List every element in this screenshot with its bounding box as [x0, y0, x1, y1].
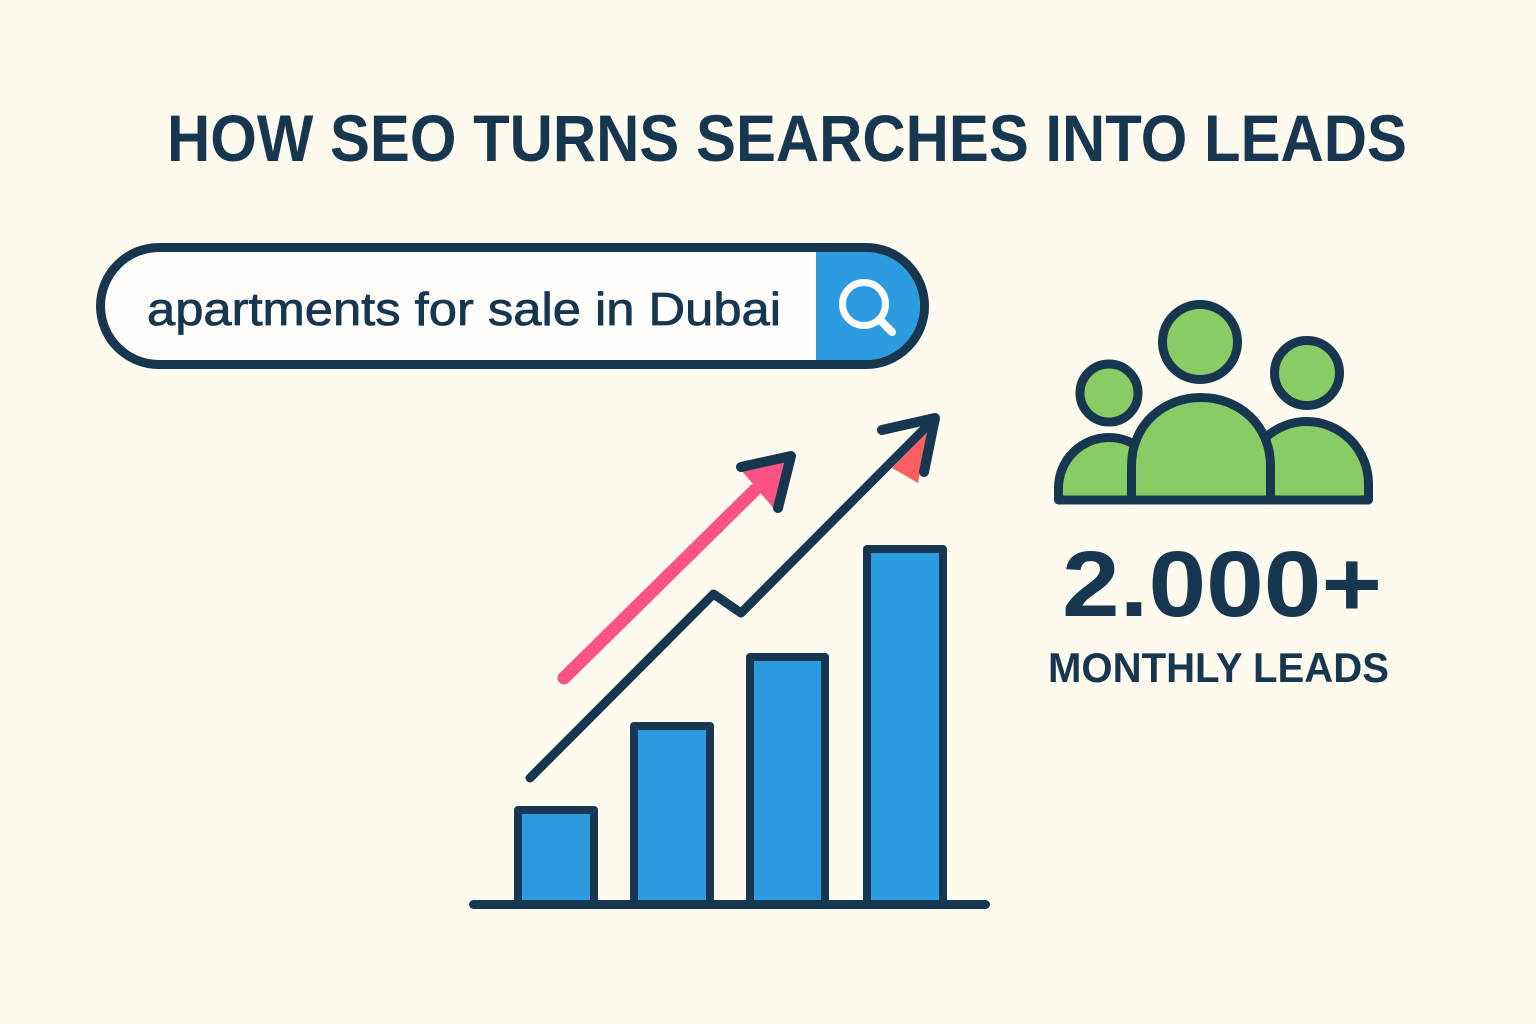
- search field background: [100, 248, 924, 364]
- pink growth arrow: [564, 456, 791, 678]
- search button: [816, 252, 920, 360]
- lead count label: MONTHLY LEADS: [1048, 644, 1389, 691]
- icon: magnifying glass: [842, 282, 892, 332]
- bar 3: [750, 657, 825, 904]
- search query text: apartments for sale in Dubai: [147, 283, 781, 335]
- bar chart: [474, 549, 986, 904]
- left person: [1058, 364, 1160, 500]
- dark trend arrow: [530, 418, 935, 778]
- bar 1: [518, 810, 594, 904]
- search bar outline: [100, 248, 924, 364]
- search bar: [100, 248, 924, 364]
- right person: [1245, 340, 1368, 500]
- chart baseline: [474, 900, 986, 909]
- center person: [1132, 304, 1270, 500]
- bar 2: [634, 726, 710, 904]
- icon: group of people: [1058, 304, 1368, 500]
- title: HOW SEO TURNS SEARCHES INTO LEADS: [167, 101, 1407, 175]
- lead count number: 2.000+: [1062, 532, 1382, 636]
- bar 4: [867, 549, 943, 904]
